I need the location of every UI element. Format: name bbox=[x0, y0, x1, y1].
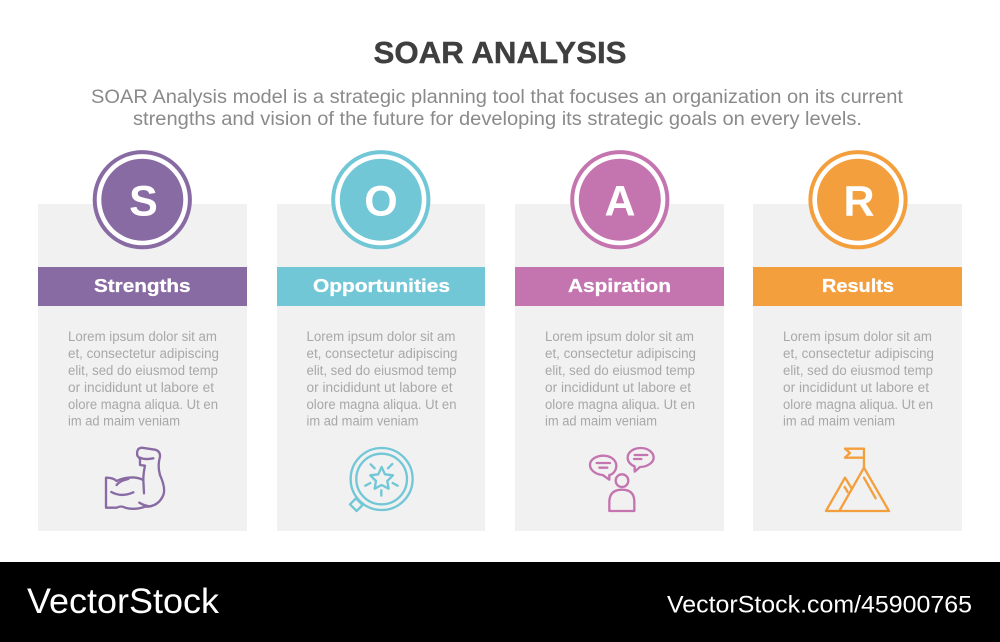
badge: A: A bbox=[604, 178, 636, 226]
body text: results: im ad maim veniam bbox=[783, 414, 895, 428]
body text: strengths: im ad maim veniam bbox=[68, 414, 180, 428]
icon: flexed arm bbox=[106, 448, 164, 509]
body text: aspiration bbox=[545, 329, 696, 428]
title: SOAR ANALYSIS bbox=[374, 35, 626, 70]
footer url text: VectorStock.com/45900765 bbox=[667, 592, 972, 618]
body text: strengths: et, consectetur adipiscing bbox=[68, 346, 219, 361]
heading bar: Aspiration: Aspiration bbox=[568, 276, 671, 296]
footer logo text: VectorStock bbox=[27, 582, 220, 621]
body text: results: olore magna aliqua. Ut en bbox=[783, 397, 933, 412]
body text: opportunities: Lorem ipsum dolor sit am bbox=[306, 329, 456, 344]
body text: opportunities: olore magna aliqua. Ut en bbox=[306, 397, 456, 412]
footer bar bbox=[0, 562, 1000, 642]
body text: opportunities: or incididunt ut labore et bbox=[306, 380, 453, 395]
body text: aspiration: or incididunt ut labore et bbox=[545, 380, 691, 395]
badge: S bbox=[95, 152, 190, 247]
badge: O: O bbox=[364, 178, 398, 226]
heading bar: Results: Results bbox=[822, 276, 894, 296]
badge: S: S bbox=[129, 178, 158, 226]
icon: person with speech bubbles bbox=[590, 448, 654, 511]
body text: strengths: or incididunt ut labore et bbox=[68, 380, 214, 395]
body text: aspiration: et, consectetur adipiscing bbox=[545, 346, 696, 361]
body text: strengths: Lorem ipsum dolor sit am bbox=[68, 329, 217, 344]
body text: aspiration: im ad maim veniam bbox=[545, 414, 657, 428]
body text: opportunities: im ad maim veniam bbox=[306, 414, 418, 428]
body text: aspiration: elit, sed do eiusmod temp bbox=[545, 363, 695, 378]
body text: aspiration: olore magna aliqua. Ut en bbox=[545, 397, 695, 412]
panel: aspiration bbox=[515, 152, 724, 531]
badge: O bbox=[333, 152, 428, 247]
body text: strengths bbox=[68, 329, 219, 428]
body text: strengths: elit, sed do eiusmod temp bbox=[68, 363, 218, 378]
heading bar: Strengths: Strengths bbox=[94, 276, 190, 296]
body text: aspiration: Lorem ipsum dolor sit am bbox=[545, 329, 694, 344]
heading bar: Aspiration bbox=[515, 267, 724, 306]
subtitle text: SOAR Analysis model is a strategic planning tool that focuses an organization on its current bbox=[91, 87, 904, 108]
subtitle text bbox=[91, 87, 904, 130]
heading bar: Results bbox=[753, 267, 962, 306]
badge: R: R bbox=[843, 178, 875, 226]
body text: results: elit, sed do eiusmod temp bbox=[783, 363, 933, 378]
body text: results: Lorem ipsum dolor sit am bbox=[783, 329, 932, 344]
subtitle text: strengths and vision of the future for developing its strategic goals on every levels. bbox=[133, 109, 862, 130]
body text: results: et, consectetur adipiscing bbox=[783, 346, 934, 361]
icon: magnifier with star bbox=[350, 448, 413, 511]
body text: opportunities bbox=[306, 329, 458, 428]
body text: opportunities: et, consectetur adipiscing bbox=[306, 346, 458, 361]
panel: results bbox=[753, 152, 962, 531]
badge: R bbox=[810, 152, 906, 247]
heading bar: Opportunities bbox=[277, 267, 485, 306]
panel: opportunities bbox=[277, 152, 485, 531]
panel: strengths bbox=[38, 152, 247, 531]
heading bar: Strengths bbox=[38, 267, 247, 306]
body text: opportunities: elit, sed do eiusmod temp bbox=[306, 363, 456, 378]
body text: results bbox=[783, 329, 934, 428]
icon: mountain with flag bbox=[826, 449, 889, 511]
body text: strengths: olore magna aliqua. Ut en bbox=[68, 397, 218, 412]
badge: A bbox=[572, 152, 667, 247]
body text: results: or incididunt ut labore et bbox=[783, 380, 929, 395]
heading bar: Opportunities: Opportunities bbox=[313, 276, 450, 296]
